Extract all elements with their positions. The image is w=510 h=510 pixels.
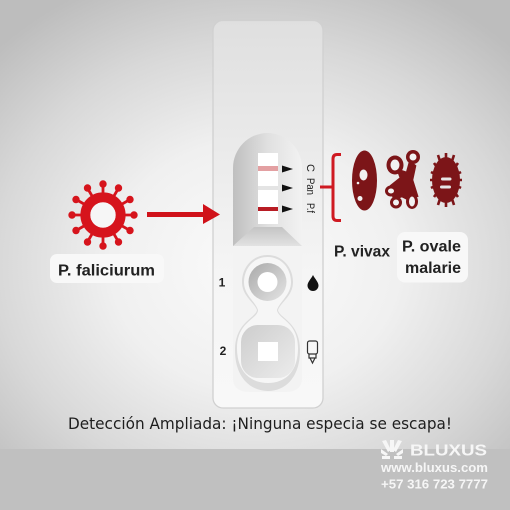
pan line	[258, 186, 278, 190]
phone: +57 316 723 7777	[381, 478, 488, 492]
sample wells	[235, 255, 300, 391]
strip labels: P.f	[304, 203, 316, 214]
label 1: 1	[219, 276, 226, 290]
wordmark: BLUXUS	[410, 442, 487, 460]
cassette body	[213, 20, 323, 408]
brand block	[380, 440, 488, 492]
result arrowheads	[282, 166, 293, 212]
well 1	[248, 263, 286, 301]
strip labels	[304, 164, 316, 214]
caption: Detección Ampliada: ¡Ninguna especia se escapa!	[68, 414, 452, 433]
bottom band	[0, 449, 510, 510]
label: P. faliciurum: P. faliciurum	[58, 262, 155, 280]
icon: logo	[381, 440, 403, 459]
icon: lobed parasite	[385, 150, 420, 209]
label: P. ovale malarie: malarie	[405, 260, 461, 277]
test strip	[258, 153, 278, 224]
control line	[258, 166, 278, 171]
label: P. vivax: P. vivax	[334, 244, 390, 260]
icon: dropper	[308, 341, 318, 363]
arrow	[147, 204, 220, 224]
sample panel	[233, 249, 302, 392]
well outer shadow	[235, 255, 300, 391]
label: P. faliciurum	[50, 254, 164, 283]
icon: oval parasite	[352, 150, 377, 210]
icon: red parasite	[68, 180, 138, 250]
strip labels: C	[304, 164, 316, 172]
label 2: 2	[220, 344, 227, 358]
label: P. ovale malarie	[397, 232, 468, 282]
website: www.bluxus.com	[380, 461, 488, 475]
well 2	[241, 325, 295, 378]
result window	[233, 133, 302, 246]
pf line	[258, 207, 278, 211]
test cassette	[213, 20, 323, 408]
strip labels: Pan	[304, 178, 316, 195]
label: P. ovale malarie: P. ovale	[402, 238, 461, 256]
icon: spiked parasite	[430, 153, 462, 207]
icon: blood drop	[308, 275, 318, 291]
bracket	[320, 154, 341, 220]
well outline	[237, 257, 298, 383]
